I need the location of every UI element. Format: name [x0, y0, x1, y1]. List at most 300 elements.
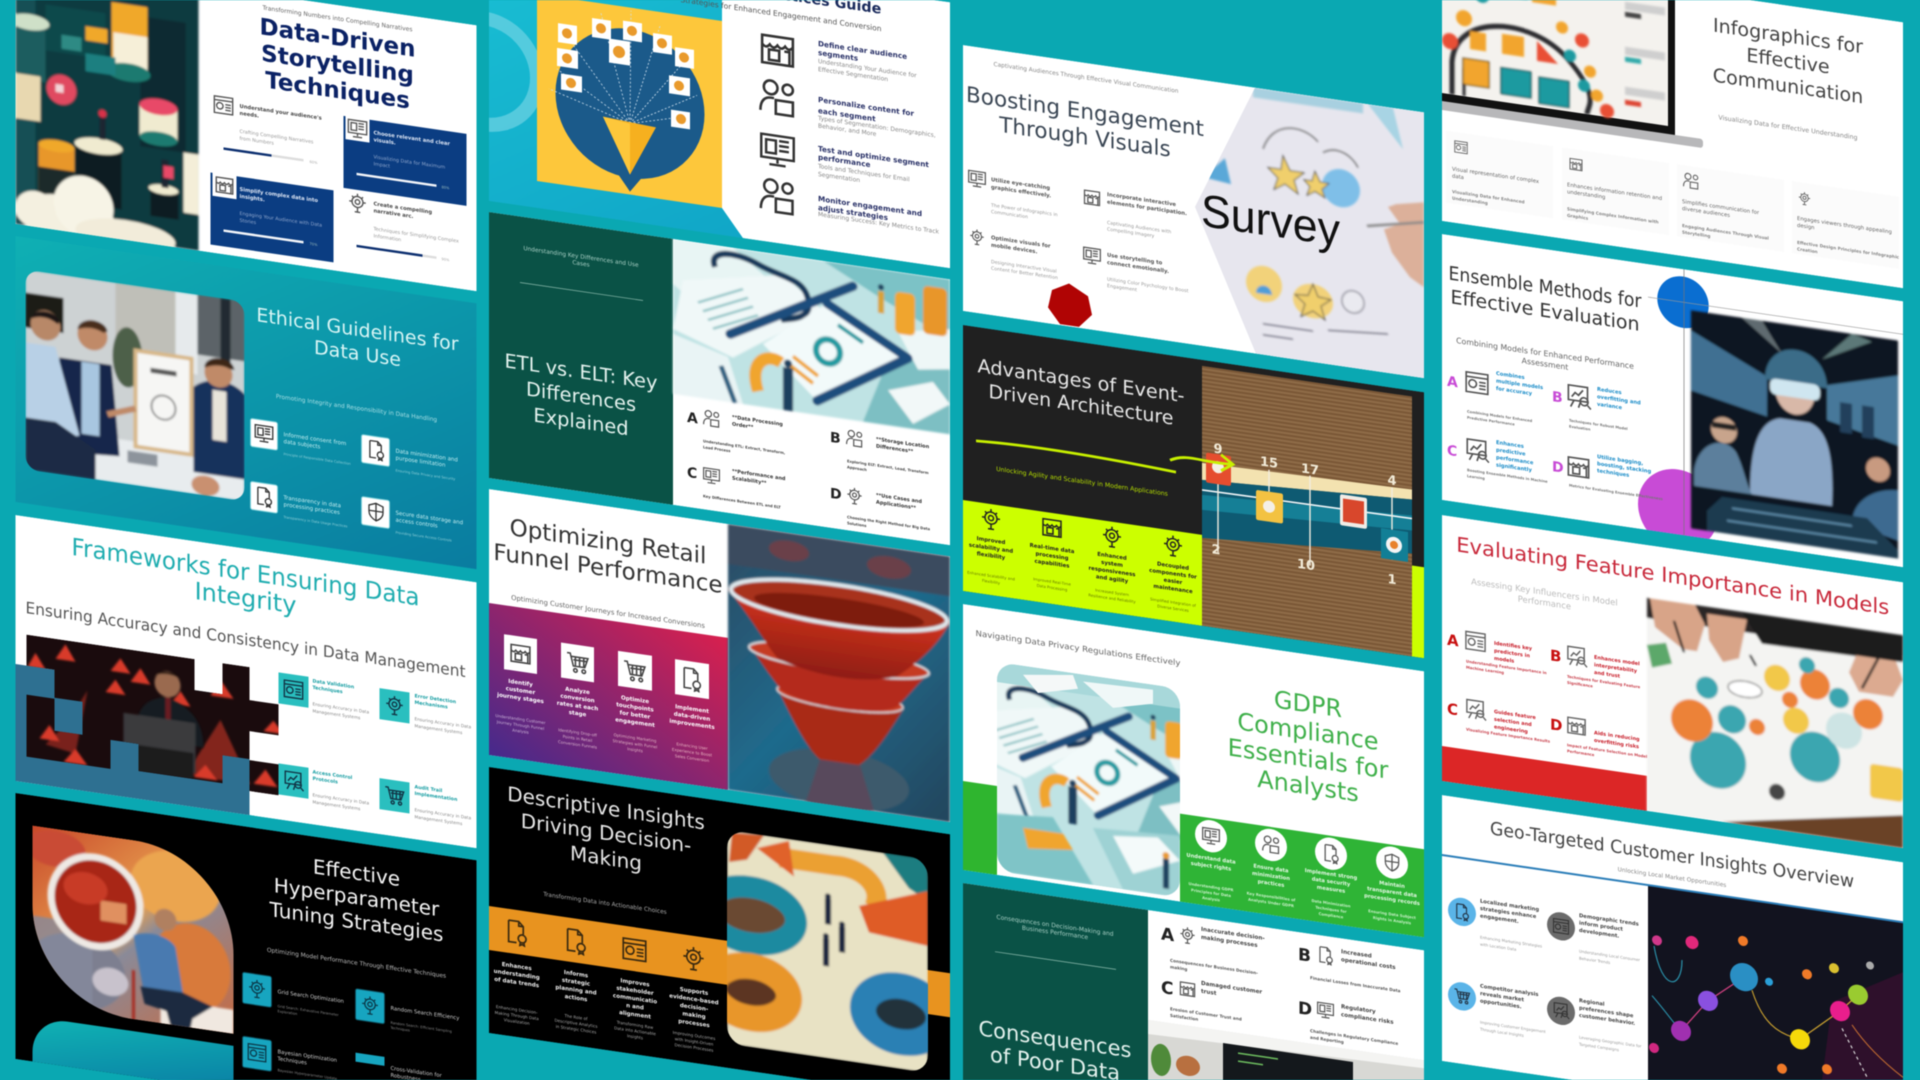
item: mobile: mobile devices.	[991, 243, 1037, 255]
title: Frameworks for Ensuring Data	[72, 533, 419, 612]
card 3: Simplifies communication for	[1682, 199, 1760, 216]
item: informed consent: data subjects	[284, 439, 320, 451]
item B: Significance	[1567, 680, 1593, 689]
subtitle: Performance	[1518, 594, 1571, 611]
item D: Aids in reducing	[1594, 730, 1640, 743]
item D: D	[830, 486, 842, 503]
photo: timeline on wood: 1	[1387, 572, 1397, 588]
icon row	[509, 920, 704, 972]
item: storytelling	[1084, 247, 1189, 301]
item D: Metrics for Evaluating Ensemble Effectiveness	[1569, 484, 1663, 501]
item: interactive: Captivating Audiences with	[1107, 220, 1171, 235]
title: Compliance	[1237, 707, 1379, 756]
item: graphics: graphics effectively.	[991, 185, 1051, 199]
illustration: laptop with infographic	[1437, 0, 1703, 148]
card 1: Understanding	[1452, 195, 1488, 207]
item: personalize content: Behavior, and More	[818, 123, 877, 138]
item: data minimization	[362, 435, 458, 482]
column 1: Understand data	[1186, 853, 1236, 866]
item: error detection: Ensuring Accuracy in Data	[414, 716, 471, 731]
panel: Evaluating Feature Importance in Models	[1442, 515, 1903, 848]
item: regional preferences: Leveraging Geographic Data for	[1579, 1035, 1642, 1049]
column 2: processing	[1036, 551, 1069, 562]
item C: Enhances	[1496, 440, 1524, 450]
item: error detection	[380, 688, 471, 738]
photo: monitor on desk	[1148, 1020, 1424, 1080]
item A: Identifies key	[1494, 641, 1533, 652]
photo: paths and people	[706, 827, 939, 1075]
item: informed consent: Informed consent from	[284, 432, 346, 447]
Survey lettering: Survey	[1201, 184, 1341, 256]
item: bayesian optimization: Techniques	[277, 1056, 307, 1067]
illustration: funnel with audience	[537, 0, 722, 208]
item B: Reduces	[1597, 387, 1622, 396]
item A	[1447, 364, 1543, 431]
item: random search: Random Search: Efficient Sampling	[390, 1021, 452, 1034]
item: interactive: Incorporate interactive	[1107, 192, 1176, 208]
title: Through Visuals	[998, 113, 1171, 163]
column 4	[669, 658, 715, 764]
title: Consequences	[979, 1015, 1131, 1063]
title: Effective	[313, 855, 400, 891]
title: Explained	[533, 404, 629, 440]
card 2	[1562, 148, 1669, 235]
lime scribble arrow	[976, 419, 1233, 480]
item: transparency	[250, 481, 348, 528]
item A: **Data Processing	[732, 414, 783, 428]
card 2: Enhances information retention and	[1567, 182, 1662, 202]
column 4 note: with Insight-Driven	[675, 1036, 714, 1047]
item: data validation: Ensuring Accuracy in Data	[312, 701, 369, 716]
column 2	[557, 642, 598, 750]
item C: Learning	[1467, 474, 1485, 481]
item D: Impact of Feature Selection on Model	[1567, 742, 1647, 759]
column 2: strategic	[562, 978, 590, 988]
column 2: Real-time data	[1030, 543, 1075, 555]
item: test and optimize	[761, 134, 929, 194]
column 1: Understanding GDPR	[1189, 881, 1234, 892]
column 3: data security	[1312, 876, 1351, 888]
card: simplify data: insights.	[240, 194, 265, 203]
item D: Performance	[1567, 748, 1595, 757]
column 2: actions	[565, 994, 588, 1003]
column 2: Analyze	[565, 687, 590, 696]
photo: analyst with red warnings	[26, 634, 280, 796]
card: audience needs	[214, 96, 322, 166]
item: random search: Techniques	[390, 1026, 410, 1033]
photo: survey sketch	[1188, 78, 1424, 378]
column 2: conversion	[560, 694, 595, 705]
subtitle: Unlocking Local Market Opportunities	[1618, 867, 1726, 889]
subtitle: Promoting Integrity and Responsibility in Data Handling	[276, 394, 437, 424]
item A: Combining Models for Enhanced	[1467, 410, 1533, 423]
column 1 note: Visualization	[504, 1017, 530, 1026]
column 3: Techniques for	[1315, 904, 1347, 914]
subtitle: Optimizing Customer Journeys for Increased Conversions	[511, 594, 705, 630]
item: define segments: Effective Segmentation	[818, 66, 888, 83]
card: narrative arc: Techniques for Simplifying Complex	[373, 226, 459, 245]
column 1: journey stages	[496, 692, 544, 705]
item D	[830, 484, 930, 537]
card 1: data	[1452, 173, 1464, 181]
item C: **Performance and	[732, 468, 786, 482]
column 1: scalability and	[969, 542, 1013, 555]
item: competitor analysis: Through Local Insights	[1479, 1026, 1524, 1038]
item C: C	[1447, 443, 1457, 460]
panel: Data-Driven Storytelling Techniques	[10, 0, 476, 303]
item: access control: Ensuring Accuracy in Data	[312, 792, 369, 807]
item B: interpretability	[1594, 662, 1638, 675]
item: informed consent: Principle of Responsible Data Collection	[284, 452, 351, 466]
panel: Advantages of Event-Driven Architecture	[963, 325, 1424, 658]
column 3: Insights	[627, 746, 643, 753]
item: storytelling: connect emotionally.	[1107, 260, 1169, 275]
item: localized marketing: with Location Data	[1480, 942, 1517, 952]
photo: man among data bubbles	[26, 824, 234, 1035]
item D: **Use Cases and	[876, 493, 922, 505]
item B: Techniques for Robust Model	[1569, 419, 1628, 431]
subtitle: Assessing Key Influencers in Model	[1471, 576, 1618, 608]
item: error detection: Management Systems	[414, 723, 463, 736]
column 4: maintenance	[1153, 584, 1193, 595]
item A: A	[1161, 924, 1175, 946]
column 4 note: Simplified Integration of	[1150, 596, 1197, 608]
column 3 note: Insights	[627, 1033, 643, 1040]
photo: data city illustration	[10, 0, 198, 263]
item: error detection: Mechanisms	[414, 700, 448, 711]
subtitle: Combining Models for Enhanced Performance	[1456, 336, 1634, 371]
decorative ring	[488, 12, 538, 132]
item: define segments	[762, 31, 917, 87]
panel: Geo-Targeted Customer Insights Overview	[1442, 795, 1903, 1080]
column 3: engagement	[615, 717, 655, 729]
column 2: Analysts Under GDPR	[1248, 897, 1294, 908]
column 1 note: Enhancing Decision-	[496, 1004, 538, 1015]
item: personalize content: Personalize content for	[818, 95, 914, 118]
card: relevant visuals: Impact	[374, 161, 390, 170]
item C: Guides feature	[1494, 709, 1536, 721]
item C: predictive	[1496, 447, 1526, 458]
item B: operational costs	[1341, 957, 1396, 971]
card: narrative arc: Create a compelling	[374, 201, 432, 216]
column 3 note: Increased System	[1095, 587, 1129, 597]
column 3: n and	[626, 1003, 644, 1012]
column 4: Enhancing User	[676, 741, 708, 751]
item: graphics: Utilize eye-catching	[991, 177, 1050, 192]
panel: Consequences of Poor Data Quality	[963, 883, 1424, 1080]
item A: A	[1447, 631, 1459, 650]
title: Driven Architecture	[989, 380, 1173, 430]
column 1 note: Making Through Data	[495, 1010, 539, 1021]
item A: Consequences for Business Decision-	[1170, 958, 1258, 976]
item: data validation: Techniques	[312, 685, 343, 695]
column 1: Principles for Data	[1191, 887, 1231, 898]
item: audit trail: Ensuring Accuracy in Data	[414, 807, 471, 822]
subtitle: Business Performance	[1022, 925, 1088, 941]
subtitle: Assessment	[1522, 356, 1568, 372]
item D: D	[1550, 715, 1562, 735]
item B	[830, 427, 930, 481]
item B	[1550, 644, 1641, 695]
item: regional preferences: preferences shape	[1579, 1005, 1634, 1019]
column 2 note: in Strategic Choices	[556, 1024, 596, 1035]
column 3	[1305, 834, 1357, 922]
item: monitor engagement: Monitor engagement and	[818, 194, 922, 218]
title: Driving Decision-	[521, 809, 691, 858]
item: secure storage	[362, 497, 463, 544]
item C: Scalability**	[732, 475, 767, 487]
item: interactive	[1084, 189, 1187, 244]
card: simplify data: Simplify complex data into	[240, 187, 318, 204]
item D	[1550, 715, 1647, 765]
column 4: evidence-based	[669, 993, 719, 1007]
panel: Descriptive Insights Driving Decision-Making	[489, 767, 950, 1080]
item: define segments: Understanding Your Audience for	[818, 58, 917, 79]
card: narrative arc: narrative arc.	[374, 208, 413, 220]
panel: Optimizing Retail Funnel Performance	[489, 489, 950, 826]
title: Funnel Performance	[493, 540, 723, 599]
item: localized marketing: Localized marketing	[1480, 899, 1539, 913]
item B: Financial Losses from Inaccurate Data	[1310, 975, 1401, 993]
card 3: Storytelling	[1682, 230, 1711, 240]
item D: D	[1552, 459, 1564, 477]
item: competitor analysis: opportunities.	[1480, 998, 1522, 1010]
item: grid search: Grid Search Optimization	[278, 989, 344, 1005]
item: monitor engagement: Measuring Success: Key Metrics to Track	[818, 211, 939, 236]
column 2 note: Data Processing	[1037, 583, 1068, 592]
item: data validation	[278, 672, 369, 723]
card: relevant visuals: visuals.	[374, 137, 396, 147]
item: demographic trends: Demographic trends	[1579, 913, 1639, 928]
item: audit trail: Implementation	[414, 791, 458, 803]
item D	[1298, 998, 1398, 1053]
item: competitor analysis: Competitor analysis	[1480, 984, 1539, 998]
card 4: Effective Design Principles for Infographic	[1797, 240, 1900, 261]
item: audit trail	[380, 778, 471, 829]
column 3	[613, 650, 657, 756]
card 3: Engaging Audiences Through Visual	[1682, 223, 1769, 242]
column 2: stage	[569, 710, 586, 719]
item: error detection: Error Detection	[414, 693, 457, 705]
card: narrative arc: Information	[374, 233, 401, 243]
item: access control: Protocols	[312, 776, 338, 786]
column 1: Identify	[508, 679, 533, 688]
card 2: Simplifying Complex Information with	[1567, 206, 1659, 226]
column 4: improvements	[669, 719, 715, 731]
card: relevant visuals	[344, 115, 466, 206]
subtitle: Optimizing Model Performance Through Effective Techniques	[267, 947, 446, 980]
item A: predictors in	[1494, 648, 1530, 659]
column 4 note: Decision Processes	[675, 1042, 713, 1053]
item D: Applications**	[876, 500, 916, 511]
item A: Understanding Feature Importance in	[1466, 659, 1547, 675]
subtitle: Understanding Key Differences and Use	[523, 246, 639, 269]
column 2: planning and	[555, 985, 597, 997]
item: demographic trends: Behavior Trends	[1579, 956, 1610, 965]
photo: timeline on wood: 10	[1297, 557, 1315, 574]
panel: Ethical Guidelines for Data Use	[16, 270, 477, 570]
decorative red heptagon	[1048, 280, 1092, 329]
title: Geo-Targeted Customer Insights Overview	[1490, 818, 1854, 892]
column 3: Enhanced	[1097, 552, 1127, 562]
card 4: design	[1797, 223, 1815, 231]
panel: ETL vs. ELT	[489, 212, 950, 545]
item: test and optimize: Test and optimize segment	[818, 144, 929, 169]
item A: making	[1170, 964, 1187, 972]
item A: Combines	[1496, 371, 1525, 381]
item: bayesian optimization	[242, 1036, 337, 1080]
title: Infographics for	[1713, 14, 1863, 58]
card: simplify data: Engaging Your Audience with Data	[240, 211, 322, 229]
title: Data-Driven	[260, 14, 415, 63]
title: Essentials for	[1228, 733, 1388, 785]
column 4: Experience to Boost	[672, 747, 712, 758]
column 3: communicatio	[613, 993, 657, 1006]
column 3: Strategies with Funnel	[613, 738, 657, 750]
item: informed consent	[250, 418, 351, 466]
column 4: processing records	[1364, 893, 1420, 907]
subtitle: Consequences on Decision-Making and	[996, 914, 1114, 938]
card: simplify data: Stories	[240, 218, 257, 226]
item: competitor analysis	[1448, 979, 1546, 1041]
item C: Satisfaction	[1170, 1013, 1198, 1022]
subtitle: Captivating Audiences Through Effective Visual Communication	[994, 62, 1179, 95]
column 1: of data trends	[494, 977, 540, 989]
item: demographic trends: inform product	[1579, 920, 1623, 933]
item B	[1552, 380, 1641, 439]
column 4: processes	[678, 1019, 710, 1029]
column 3 note: Data into Actionable	[614, 1025, 656, 1036]
item: monitor engagement	[761, 178, 939, 236]
title: Ensemble Methods for	[1448, 262, 1642, 313]
item A: A	[687, 410, 698, 427]
item C: trust	[1201, 989, 1217, 997]
column 1	[1186, 817, 1236, 905]
column 4: Maintain	[1379, 880, 1405, 890]
item A	[687, 407, 786, 461]
column 4: components for	[1149, 568, 1197, 581]
card 1	[1446, 131, 1553, 218]
title: Techniques	[265, 68, 410, 115]
item B: variance	[1597, 402, 1622, 411]
item A: models	[1494, 656, 1514, 665]
item: transparency: processing practices	[284, 502, 340, 516]
item C: Visualizing Feature Importance Results	[1466, 727, 1551, 744]
subtitle: Visualizing Data for Effective Understanding	[1718, 114, 1858, 142]
item B: Evaluation	[1569, 425, 1591, 432]
item: storytelling: Utilizing Color Psychology to Boost	[1107, 277, 1189, 294]
column 2 note: Improved Real-Time	[1033, 576, 1071, 587]
item C: Boosting Ensemble Methods in Machine	[1467, 468, 1548, 484]
column 4 note: Improving Outcomes	[673, 1030, 715, 1041]
column 1 note: Flexibility	[982, 578, 1001, 586]
item: graphics: The Power of Infographics in	[990, 202, 1058, 218]
item: interactive: elements for participation.	[1107, 200, 1187, 217]
item C	[1161, 975, 1262, 1031]
card: narrative arc	[349, 193, 459, 264]
item C: engineering	[1494, 724, 1528, 735]
panel: Boosting Engagement Through Visuals	[963, 45, 1424, 378]
item B: B	[1550, 646, 1561, 666]
column 4: Implement	[675, 704, 709, 715]
card: simplify data	[210, 171, 334, 262]
item: secure storage: Providing Secure Access Controls	[395, 530, 452, 543]
column 3 note: Transforming Raw	[616, 1020, 654, 1030]
title: Effective	[1746, 44, 1830, 79]
column 4: decision-	[680, 1003, 709, 1013]
column 4: data-driven	[674, 712, 710, 723]
title: Communication	[1713, 64, 1863, 108]
item A: Machine Learning	[1466, 665, 1504, 675]
column 2: Identifying Drop-off	[558, 727, 597, 738]
item D: Choosing the Right Method for Big Data	[847, 515, 930, 531]
column 2: Ensure data	[1253, 863, 1289, 875]
item C: Erosion of Customer Trust and	[1170, 1006, 1242, 1022]
item: localized marketing: engagement.	[1480, 913, 1519, 925]
column 2 note: Descriptive Analytics	[555, 1018, 597, 1029]
column 2: Points in Retail	[563, 734, 592, 743]
item: audit trail: Management Systems	[414, 814, 463, 827]
item B: Differences**	[876, 444, 914, 455]
item D: compliance risks	[1341, 1012, 1394, 1026]
item A: Order**	[732, 421, 754, 431]
decorative magenta circle	[1638, 464, 1718, 555]
item C	[1447, 433, 1548, 490]
item: cross validation	[356, 1053, 442, 1080]
item B: and trust	[1594, 670, 1621, 680]
column 3: Optimize	[621, 695, 649, 705]
column 3 note: Resilience and Reliability	[1088, 592, 1136, 604]
column 2	[1247, 825, 1296, 909]
item: bayesian optimization: Bayesian Optimization	[278, 1049, 337, 1064]
item: test and optimize: Tools and Techniques for Email	[817, 163, 910, 183]
title: Ethical Guidelines for	[256, 303, 459, 356]
column 3: Compliance	[1319, 911, 1344, 920]
item B: B	[1552, 389, 1563, 407]
item B: B	[830, 430, 841, 447]
column 2: minimization	[1252, 871, 1290, 882]
item: monitor engagement: adjust strategies	[818, 203, 889, 222]
column 1: Analysis	[1202, 895, 1221, 903]
item: random search: Random Search Efficiency	[390, 1006, 459, 1022]
item C: selection and	[1494, 717, 1532, 728]
item: data minimization: purpose limitation	[395, 456, 446, 469]
column 3: Optimizing Marketing	[614, 732, 657, 744]
item B: overfitting and	[1597, 394, 1641, 407]
item: interactive: Compelling Imagery	[1107, 227, 1155, 239]
item D	[1552, 448, 1663, 501]
photo: business meeting	[26, 269, 244, 501]
item: transparency: Transparency in data	[283, 495, 341, 510]
card 1: Visualizing Data for Enhanced	[1452, 189, 1525, 206]
item: data minimization: Ensuring Data Privacy and Security	[395, 468, 455, 481]
item: competitor analysis: Improving Customer Engagement	[1480, 1020, 1546, 1034]
column 3: Implement strong	[1305, 868, 1357, 882]
column 4: Decoupled	[1157, 561, 1189, 572]
subtitle: Unlocking Agility and Scalability in Modern Applications	[996, 466, 1168, 498]
title: Boosting Engagement	[966, 83, 1204, 142]
column 1: Understanding Customer	[495, 713, 546, 725]
column 3: touchpoints	[616, 702, 654, 714]
panel: Email Segmentation Best Practices Guide	[488, 0, 951, 269]
item: demographic trends: Understanding Local Consumer	[1579, 949, 1640, 962]
photo: timeline on wood: 9	[1213, 442, 1223, 458]
item B: Exploring ELT: Extract, Load, Transform	[847, 459, 929, 475]
panel: GDPR Compliance Essentials for Analysts	[963, 604, 1424, 937]
item A: Inaccurate decision-	[1201, 927, 1265, 942]
item: demographic trends: development.	[1579, 928, 1619, 940]
item D: Challenges in Regulatory Compliance	[1310, 1028, 1398, 1046]
